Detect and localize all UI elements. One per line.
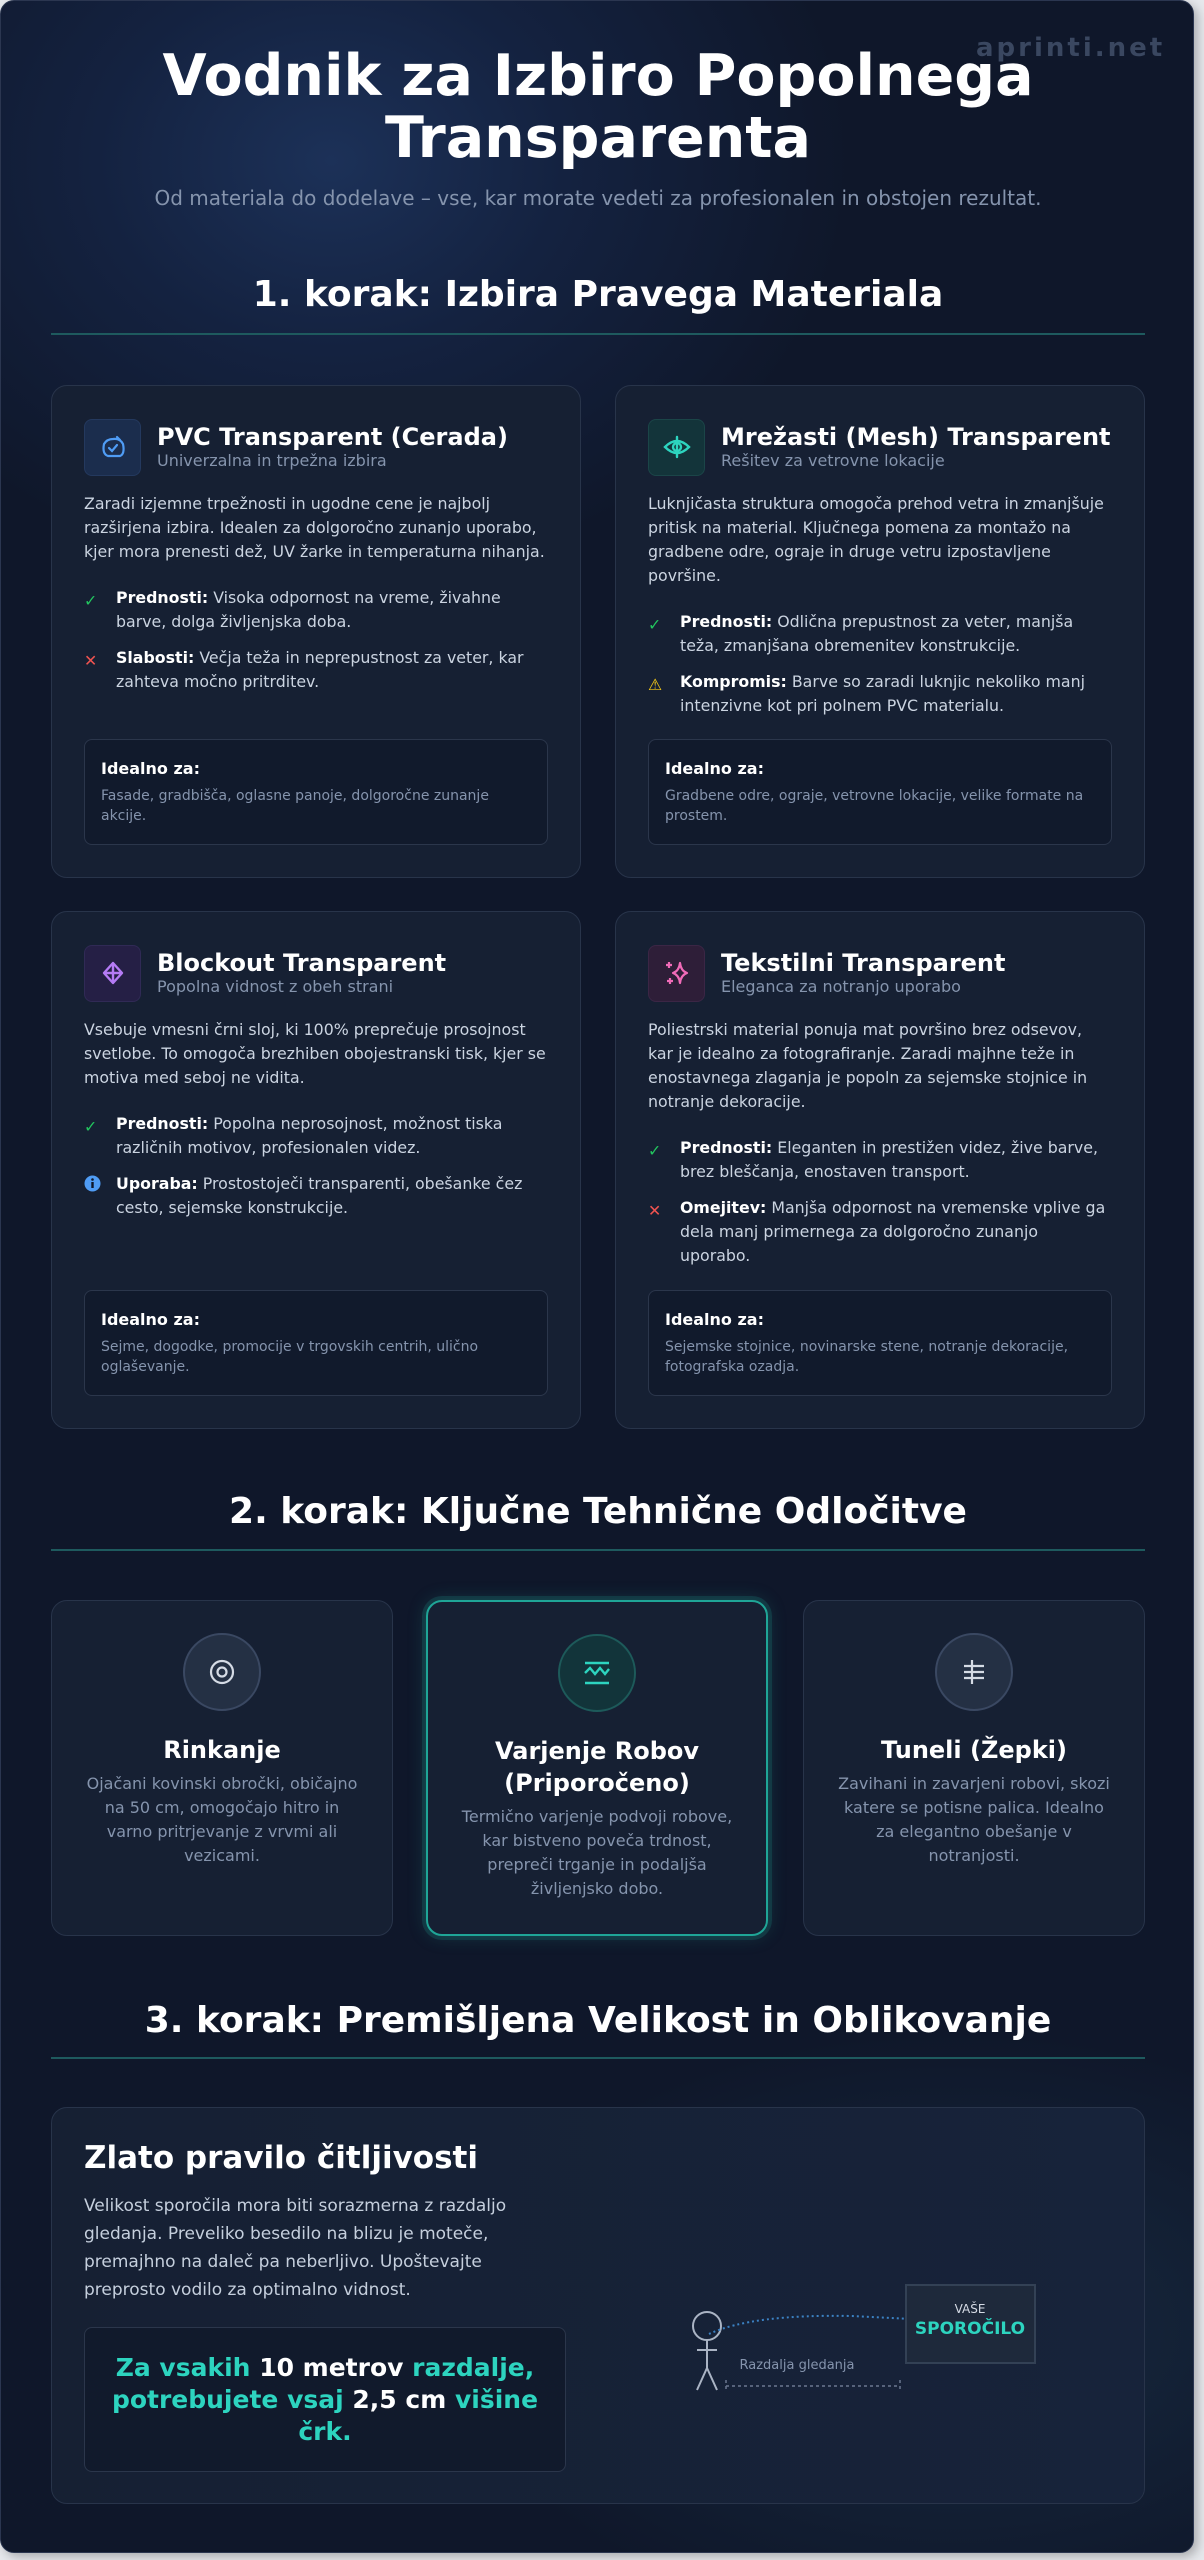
card header: Univerzalna in trpežna izbira [157,451,387,470]
icon: mesh [648,418,705,476]
list item: usage: Uporaba: Prostostoječi transparenti, obešanke čez cesto, sejemske konstrukcije. [116,1174,522,1217]
panel: Blockout [51,911,581,1429]
card header [648,419,1111,476]
message sign [906,2285,1035,2363]
panel: Mesh [615,385,1145,878]
list item: pros: Prednosti: Popolna neprosojnost, možnost tiska različnih motivov, profesionalen videz. [116,1114,502,1157]
panel: Rinkanje [51,1600,393,1936]
list item: pros: ✓ [84,1117,97,1136]
panel: PVC [51,385,581,878]
card header: Mrežasti (Mesh) Transparent [721,423,1111,451]
distance label [726,2358,900,2392]
panel: Varjenje (recommended) [426,1600,768,1936]
step text: Ojačani kovinski obročki, običajno na 50 cm, omogočajo hitro in varno pritrjevanje z vrvmi ali vezicami. [87,1774,357,1865]
panel: Textile [615,911,1145,1429]
card header [648,945,1005,1002]
list item: limitation: ✕ [648,1201,661,1220]
description: kar je idealno za fotografiranje. Zaradi majhne teže in enostavnega zlaganja je popoln za sejemske stojnice in notranje dekoracije. [648,1044,1087,1111]
card header: Popolna vidnost z obeh strani [157,977,393,996]
icon: tunnel [935,1633,1013,1711]
panel: Tuneli [803,1600,1145,1936]
step title: Tuneli (Žepki) [881,1736,1067,1764]
ideal box: Fasade, gradbišča, oglasne panoje, dolgoročne zunanje akcije. [101,788,489,824]
list item: compromise: ⚠ [648,675,662,694]
ideal box: Idealno za: [101,759,200,778]
icon: textile [648,944,705,1002]
ideal box: Sejemske stojnice, novinarske stene, notranje dekoracije, fotografska ozadja. [665,1339,1068,1375]
card header: Tekstilni Transparent [721,949,1005,977]
distance label: Razdalja gledanja [740,2358,854,2373]
list item: limitation: Omejitev: Manjša odpornost na vremenske vplive ga dela manj primernega za dolgoročno zunanjo uporabo. [680,1198,1105,1265]
card header: Eleganca za notranjo uporabo [721,977,961,996]
diagram: viewing distance [692,2284,1036,2390]
ideal box: Idealno za: [101,1310,200,1329]
step text: Termično varjenje podvoji robove, kar bistveno poveča trdnost, prepreči trganje in podaljša življenjsko dobo. [462,1807,732,1898]
ideal box [84,739,548,845]
title: Transparenta [385,105,811,171]
rule heading: Zlato pravilo čitljivosti [84,2140,478,2176]
list item: cons: Slabosti: Večja teža in neprepustnost za veter, kar zahteva močno pritrditev. [116,648,524,691]
subtitle: Od materiala do dodelave – vse, kar morate vedeti za profesionalen in obstojen rezultat. [155,186,1041,210]
step title [495,1737,699,1797]
watermark: aprinti.net [976,33,1165,63]
message sign: VAŠE [955,2301,985,2316]
icon: ring [183,1633,261,1711]
ideal box [648,1290,1112,1396]
person [693,2312,721,2390]
description: Zaradi izjemne trpežnosti in ugodne cene je najbolj razširjena izbira. Idealen za dolgoročno zunanjo uporabo, kjer mora prenesti dež, UV žarke in temperaturna nihanja. [84,494,545,561]
callout: rule [84,2327,566,2472]
ideal box: Gradbene odre, ograje, vetrovne lokacije, velike formate na prostem. [665,788,1083,824]
step title: Rinkanje [163,1736,281,1764]
sight line [709,2316,932,2334]
ideal box [84,1290,548,1396]
ideal box [648,739,1112,845]
list item: pros: ✓ [648,615,661,634]
card header: PVC Transparent (Cerada) [157,423,508,451]
step title: Varjenje Robov [495,1737,699,1765]
ideal box: Idealno za: [665,1310,764,1329]
icon: blockout [84,944,141,1002]
list item: pros: Prednosti: Eleganten in prestižen videz, žive barve, brez bleščanja, enostaven transport. [680,1138,1098,1181]
message sign: SPOROČILO [915,2317,1025,2339]
list item: pros: Prednosti: Visoka odpornost na vreme, živahne barve, dolga življenjska doba. [116,588,501,631]
list item: pros: ✓ [648,1141,661,1160]
card header [84,945,446,1002]
list item: pros: ✓ [84,591,97,610]
step text: Zavihani in zavarjeni robovi, skozi katere se potisne palica. Idealno za elegantno obešanje v notranjosti. [838,1774,1110,1865]
section heading 2: 2. korak: Ključne Tehnične Odločitve [229,1491,967,1532]
card header: Rešitev za vetrovne lokacije [721,451,945,470]
description: Vsebuje vmesni črni sloj, ki 100% preprečuje prosojnost svetlobe. To omogoča brezhiben obojestranski tisk, kjer se motiva med seboj ne vidita. [84,1020,546,1087]
title [162,43,1034,171]
panel: golden rule [51,2107,1145,2504]
title: Vodnik za Izbiro Popolnega [162,43,1034,109]
ideal box: Idealno za: [665,759,764,778]
icon: pvc [84,418,141,476]
list item: pros: Prednosti: Odlična prepustnost za veter, manjša teža, zmanjšana obremenitev konstrukcije. [680,612,1073,655]
list item: cons: ✕ [84,651,97,670]
callout: rule: Za vsakih 10 metrov razdalje, potrebujete vsaj 2,5 cm višine črk. [112,2352,538,2446]
description: Luknjičasta struktura omogoča prehod vetra in zmanjšuje pritisk na material. Ključnega pomena za montažo na gradbene odre, ograje in druge vetru izpostavljene površine. [648,494,1104,585]
description: Poliestrski material ponuja mat površino brez odsevov, [648,1020,1082,1039]
ideal box: Sejme, dogodke, promocije v trgovskih centrih, ulično oglaševanje. [101,1339,478,1375]
icon: weld [558,1634,636,1712]
section heading 1: 1. korak: Izbira Pravega Materiala [253,274,943,315]
list item: compromise: Kompromis: Barve so zaradi luknjic nekoliko manj intenzivne kot pri polnem PVC materialu. [680,672,1085,715]
section heading 3: 3. korak: Premišljena Velikost in Oblikovanje [145,2000,1051,2041]
step title: (Priporočeno) [504,1769,690,1797]
card header: Blockout Transparent [157,949,446,977]
rule text: Velikost sporočila mora biti sorazmerna z razdaljo gledanja. Preveliko besedilo na blizu je moteče, premajhno na daleč pa neberljivo. Upoštevajte preprosto vodilo za optimalno vidnost. [84,2196,506,2300]
card header [84,419,508,476]
